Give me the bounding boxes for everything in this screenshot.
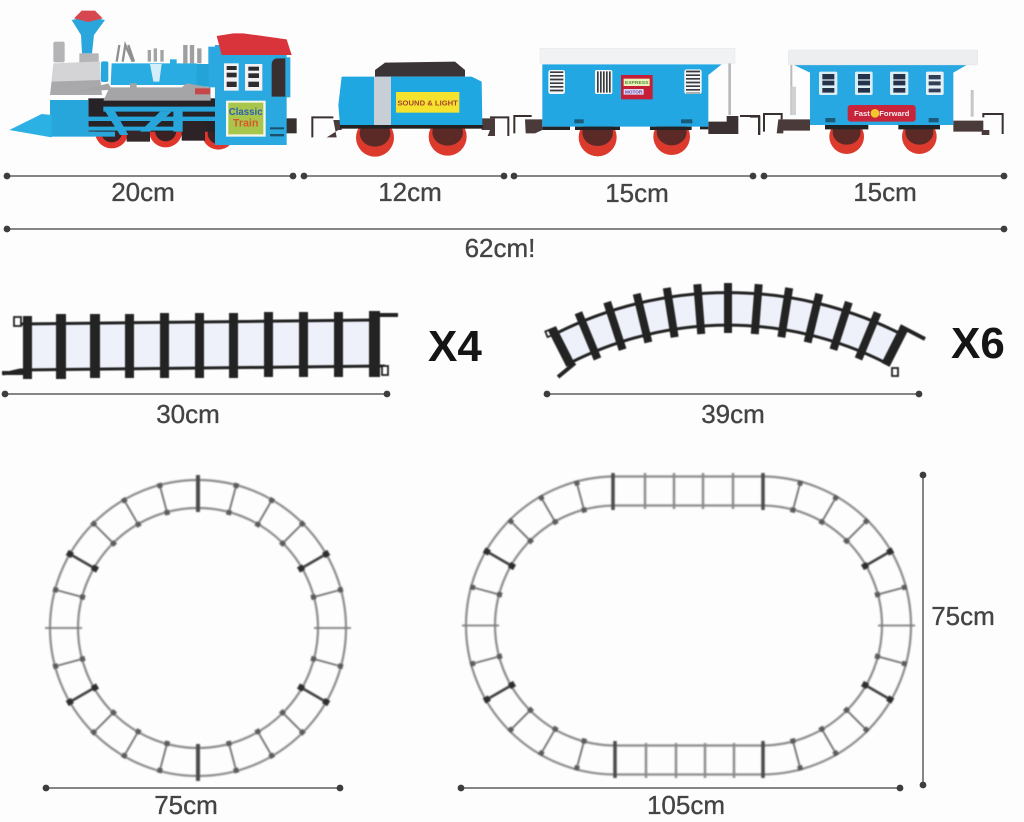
dimension: 30cm: 30cm <box>156 399 220 429</box>
locomotive <box>9 11 297 150</box>
dimension: circle 75cm <box>43 785 343 820</box>
dimension: oval height 75cm <box>920 472 995 788</box>
sign: express motor: MOTOR <box>625 89 643 94</box>
dimension: 20cm: 20cm <box>111 177 175 207</box>
dimension: circle 75cm: 75cm <box>154 790 218 820</box>
dimension: 15cm first carriage <box>511 173 756 208</box>
dimension: 12cm: 12cm <box>378 177 442 207</box>
dimension: oval height 75cm: 75cm <box>931 601 995 631</box>
dimension: 39cm: 39cm <box>701 399 765 429</box>
sign: express motor <box>621 75 653 99</box>
icon: four windows <box>819 72 944 95</box>
dimension: oval width 105cm: 105cm <box>647 790 725 820</box>
dimension: 30cm <box>2 391 390 429</box>
sign: sound and light: SOUND & LIGHT <box>397 98 458 107</box>
sign: fast forward: Fast <box>854 109 870 118</box>
curved track piece <box>545 283 925 377</box>
sign: fast forward: Forward <box>879 109 910 118</box>
dimension: 15cm second carriage <box>761 173 1007 207</box>
dimension: 12cm <box>301 173 507 207</box>
dimension: oval width 105cm <box>458 785 903 820</box>
sign: fast forward <box>848 105 916 122</box>
sign: express motor: EXPRESS <box>625 80 649 86</box>
passenger car two <box>750 50 1003 154</box>
label: X4: X4 <box>428 322 482 371</box>
dimension: total 62cm <box>4 226 1007 263</box>
dimension: 39cm <box>544 391 922 429</box>
sign: sound and light <box>396 92 459 113</box>
passenger car one <box>514 48 759 156</box>
dimension: 15cm first carriage: 15cm <box>605 178 669 208</box>
dimension: 20cm <box>4 173 296 207</box>
dimension: 15cm second carriage: 15cm <box>853 177 917 207</box>
sign: Classic Train: Train <box>233 118 258 130</box>
icon: cab windows <box>224 63 262 91</box>
label: X6: X6 <box>951 319 1005 368</box>
straight track piece <box>2 311 398 379</box>
sign: Classic Train: Classic <box>229 107 263 118</box>
oval track layout <box>462 473 915 778</box>
dimension: total 62cm: 62cm! <box>465 233 535 263</box>
icon: louvred windows <box>548 69 702 94</box>
sign: Classic Train <box>226 101 266 137</box>
circular track layout <box>45 475 351 781</box>
tender car <box>312 62 508 157</box>
